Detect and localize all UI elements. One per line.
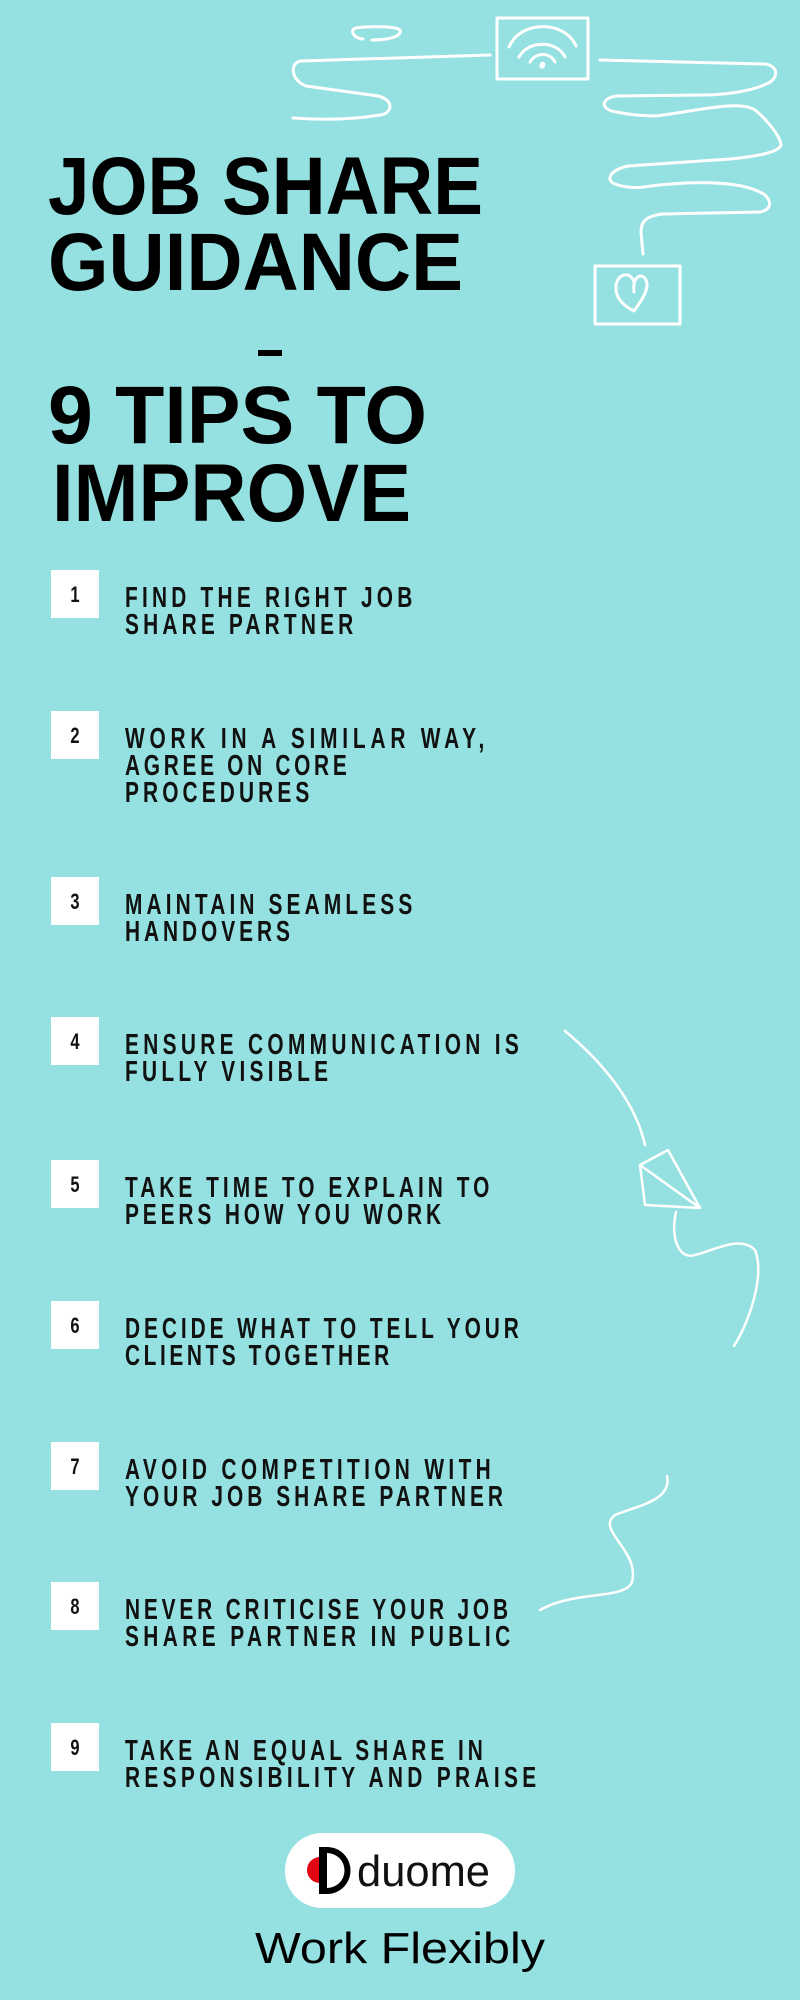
title: 9 TIPS TO [48, 370, 427, 461]
title: JOB SHARE [48, 141, 483, 232]
tip 9: RESPONSIBILITY AND PRAISE [125, 1762, 536, 1794]
tip 1: 1 [70, 583, 80, 608]
tip 5 [51, 1160, 489, 1231]
tip 8: NEVER CRITICISE YOUR JOB [125, 1594, 508, 1626]
tip 6: CLIENTS TOGETHER [125, 1340, 389, 1372]
logo: duome: duome [357, 1847, 490, 1896]
tip 6: DECIDE WHAT TO TELL YOUR [125, 1313, 519, 1345]
tip 9: TAKE AN EQUAL SHARE IN [125, 1735, 483, 1767]
title: IMPROVE [52, 448, 411, 539]
tip 3: HANDOVERS [125, 916, 290, 948]
tip 3 [51, 877, 412, 948]
decoration: paper plane doodle [565, 1031, 758, 1346]
icon: wifi box [497, 18, 588, 79]
tip 1: FIND THE RIGHT JOB [125, 582, 412, 614]
tip 7 [51, 1442, 503, 1513]
icon: heart box [595, 266, 680, 324]
tagline: Work Flexibly [255, 1924, 545, 1973]
title [48, 141, 483, 539]
title: GUIDANCE [48, 217, 463, 308]
logo: duome [285, 1833, 515, 1908]
tip 1 [51, 570, 412, 641]
decoration: top doodle with wifi and heart boxes [293, 18, 781, 324]
tip 4: FULLY VISIBLE [125, 1056, 328, 1088]
tip list [51, 570, 536, 1794]
tip 6 [51, 1301, 519, 1372]
tip 7: 7 [70, 1455, 80, 1480]
tip 3: 3 [70, 890, 80, 915]
tip 9 [51, 1723, 536, 1794]
tip 2: PROCEDURES [125, 777, 309, 809]
tip 8 [51, 1582, 510, 1653]
tip 5: PEERS HOW YOU WORK [125, 1199, 441, 1231]
tip 2 [51, 711, 484, 809]
tip 2: AGREE ON CORE [125, 750, 347, 782]
decoration: squiggle [540, 1476, 668, 1610]
tip 6: 6 [70, 1314, 80, 1339]
tip 9: 9 [70, 1736, 80, 1761]
tip 4: ENSURE COMMUNICATION IS [125, 1029, 519, 1061]
icon: duome mark [307, 1847, 350, 1894]
tip 8: SHARE PARTNER IN PUBLIC [125, 1621, 510, 1653]
tip 2: 2 [70, 724, 80, 749]
tip 4: 4 [70, 1030, 80, 1055]
tip 8: 8 [70, 1595, 80, 1620]
tip 5: TAKE TIME TO EXPLAIN TO [125, 1172, 489, 1204]
tip 7: YOUR JOB SHARE PARTNER [125, 1481, 503, 1513]
tip 5: 5 [70, 1173, 80, 1198]
tip 2: WORK IN A SIMILAR WAY, [125, 723, 484, 755]
tip 1: SHARE PARTNER [125, 609, 353, 641]
tip 4 [51, 1017, 519, 1088]
tip 3: MAINTAIN SEAMLESS [125, 889, 412, 921]
tip 7: AVOID COMPETITION WITH [125, 1454, 491, 1486]
